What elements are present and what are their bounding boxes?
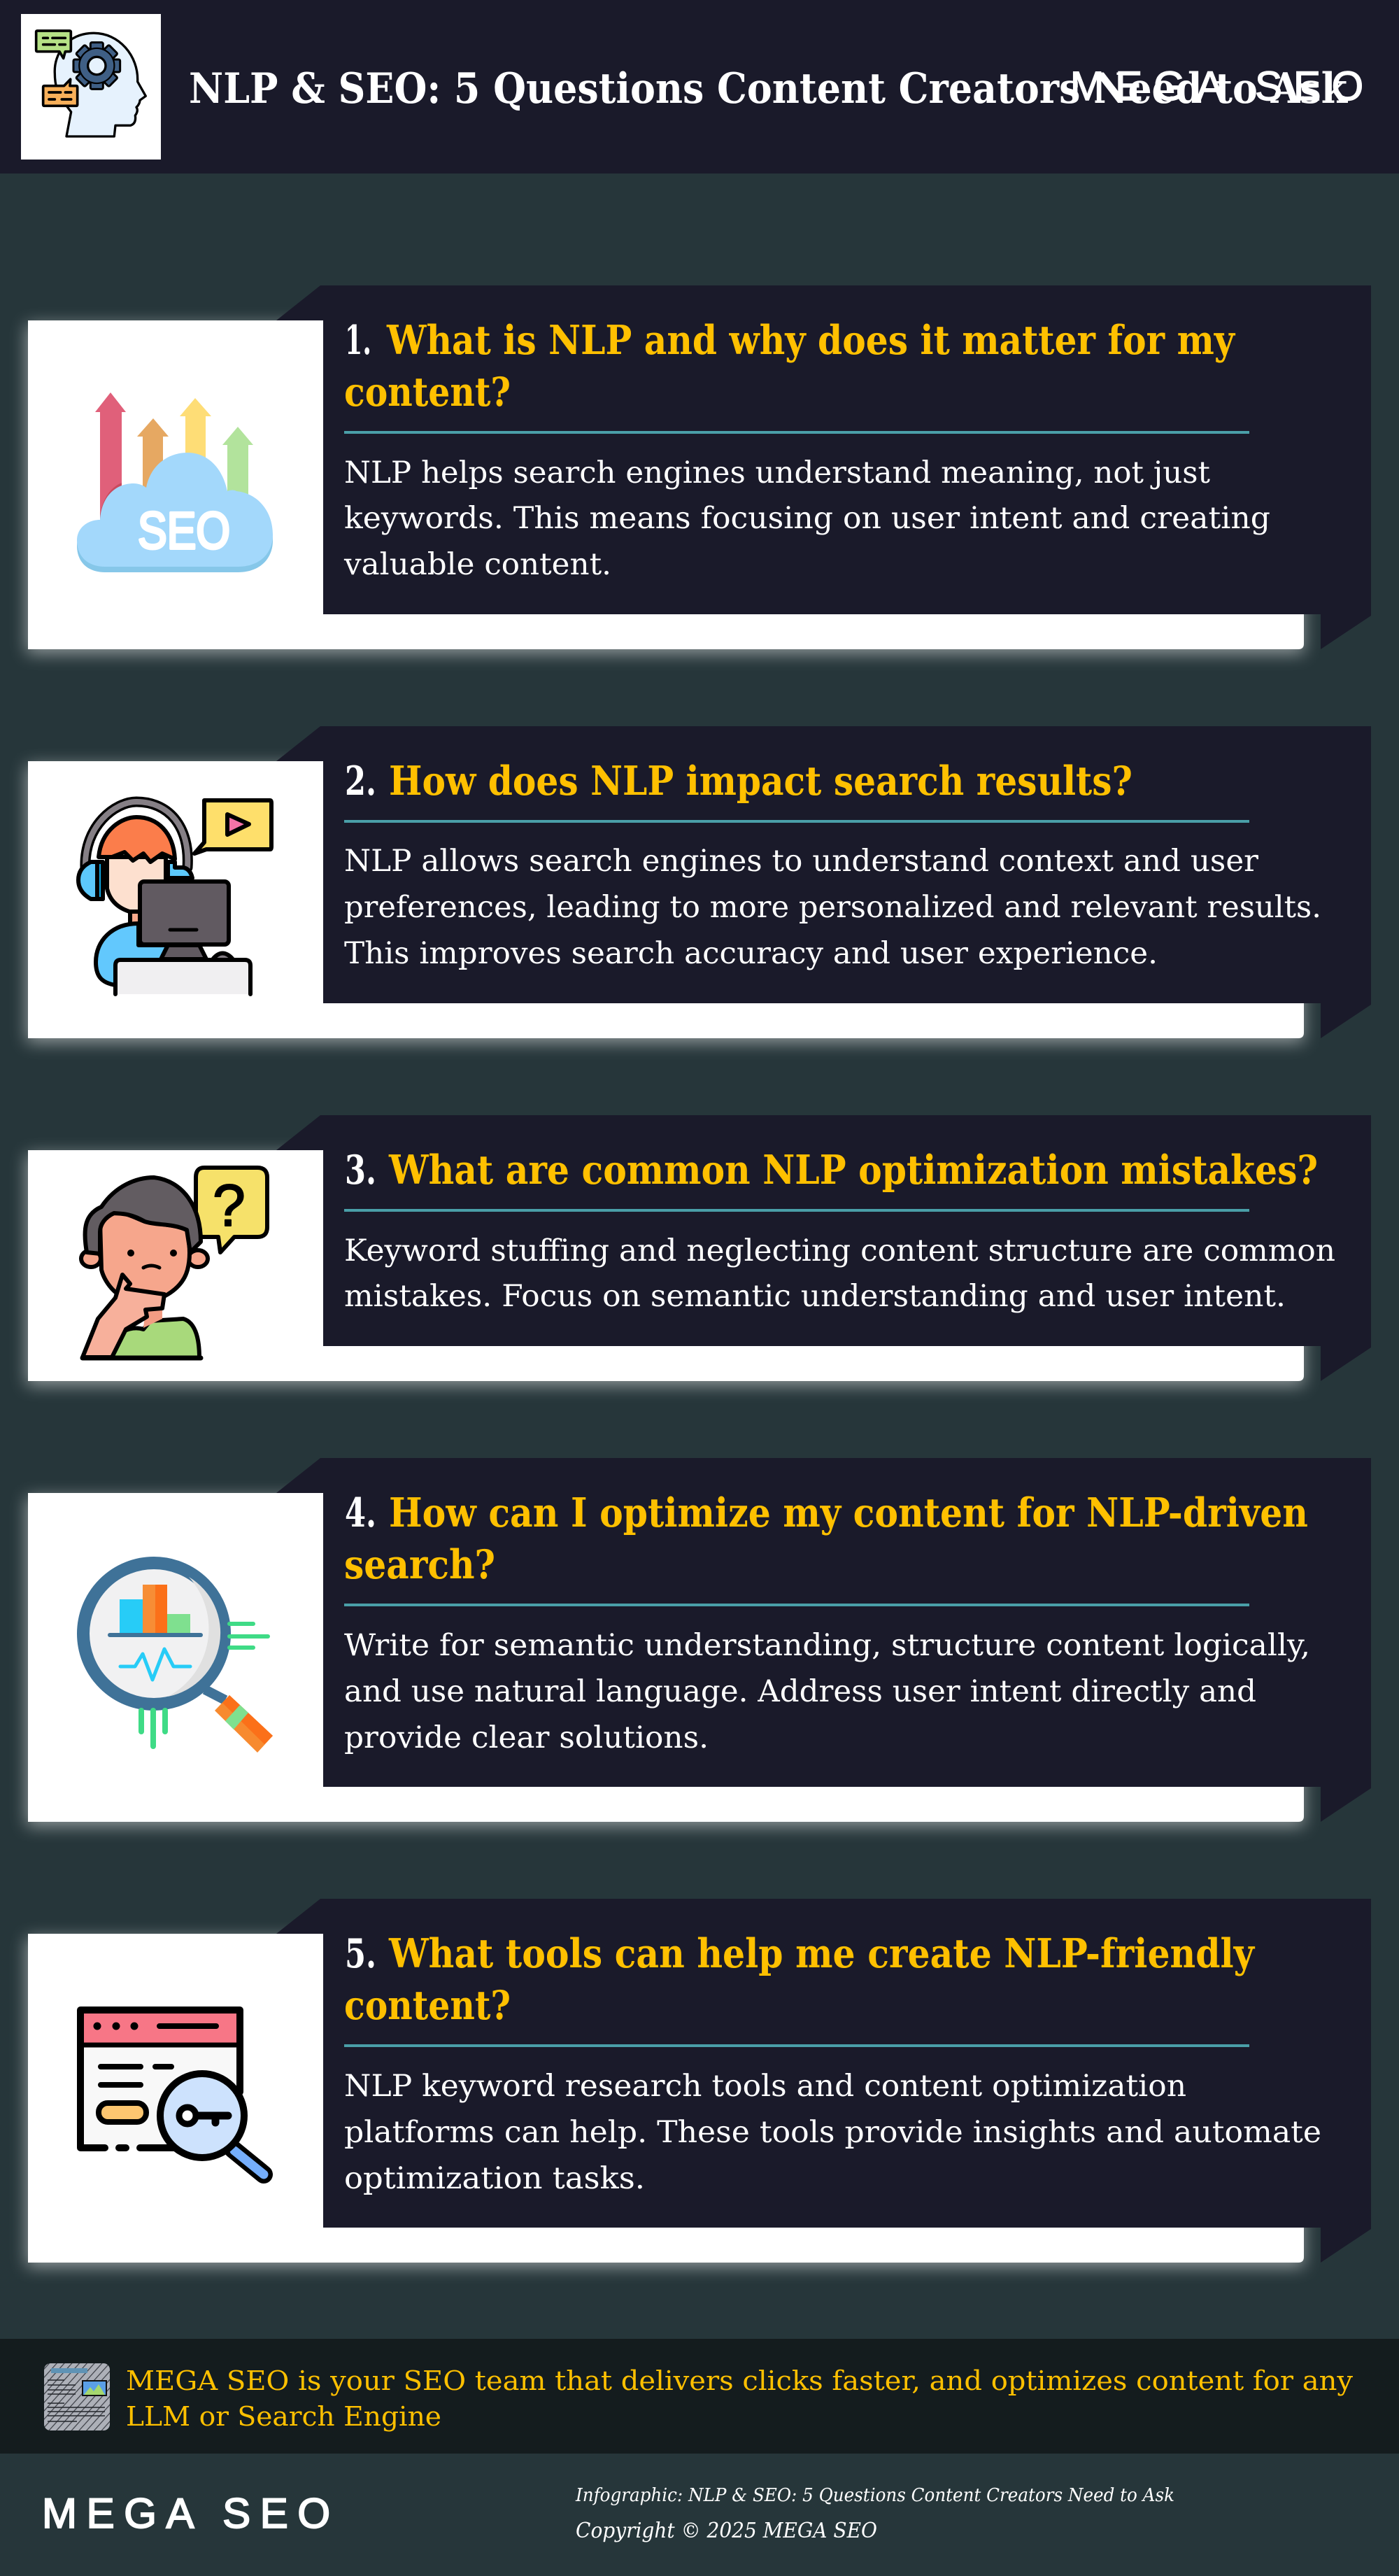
body text bbox=[343, 455, 1270, 582]
body text: provide clear solutions. bbox=[344, 1720, 709, 1755]
tagline: LLM or Search Engine bbox=[126, 2401, 441, 2432]
heading: 4. bbox=[345, 1489, 376, 1536]
body text bbox=[344, 844, 1321, 971]
heading: How does NLP impact search results? bbox=[389, 758, 1132, 805]
body text: optimization tasks. bbox=[344, 2161, 645, 2196]
heading bbox=[344, 1930, 1256, 2029]
icon: puzzled person with question mark: ? bbox=[213, 1173, 246, 1238]
body text: platforms can help. These tools provide insights and automate bbox=[344, 2115, 1321, 2150]
icon: SEO cloud with arrows bbox=[77, 392, 273, 572]
heading: What is NLP and why does it matter for my bbox=[386, 317, 1236, 364]
panel: question 3 bbox=[27, 1115, 1371, 1385]
tagline: MEGA SEO is your SEO team that delivers clicks faster, and optimizes content for any bbox=[126, 2365, 1354, 2396]
footer credits: Infographic: NLP & SEO: 5 Questions Content Creators Need to Ask bbox=[575, 2485, 1174, 2506]
brand name overlay: MEGA SEO bbox=[1070, 64, 1363, 109]
body text: and use natural language. Address user intent directly and bbox=[344, 1674, 1256, 1709]
heading: search? bbox=[344, 1541, 495, 1588]
icon: person with headset at monitor bbox=[78, 800, 271, 994]
body text: NLP allows search engines to understand context and user bbox=[344, 844, 1258, 879]
heading: 3. bbox=[345, 1147, 376, 1194]
heading bbox=[344, 317, 1236, 416]
body text: keywords. This means focusing on user intent and creating bbox=[344, 501, 1270, 536]
heading: 2. bbox=[345, 758, 376, 805]
panel: question 1 bbox=[27, 285, 1371, 653]
body text: Keyword stuffing and neglecting content structure are common bbox=[344, 1233, 1335, 1268]
heading bbox=[344, 1489, 1308, 1588]
heading: How can I optimize my content for NLP-driven bbox=[389, 1489, 1308, 1536]
icon: SEO cloud with arrows: SEO bbox=[138, 502, 230, 560]
body text bbox=[344, 1628, 1310, 1755]
footer credits: Copyright © 2025 MEGA SEO bbox=[576, 2519, 877, 2543]
icon: magnifying glass with chart bbox=[83, 1563, 273, 1753]
heading: What tools can help me create NLP-friendly bbox=[388, 1930, 1256, 1977]
icon: sketched document thumbnail bbox=[44, 2363, 110, 2430]
panel: question 2 bbox=[27, 726, 1371, 1042]
body text: mistakes. Focus on semantic understanding and user intent. bbox=[344, 1279, 1286, 1314]
footer logo: MEGA SEO bbox=[42, 2490, 330, 2537]
icon: browser window with key magnifier bbox=[80, 2010, 264, 2174]
body text: This improves search accuracy and user experience. bbox=[344, 936, 1158, 971]
heading: content? bbox=[344, 1982, 511, 2029]
body text bbox=[344, 1233, 1335, 1314]
panel: question 5 bbox=[27, 1899, 1371, 2267]
heading: 5. bbox=[345, 1930, 376, 1977]
panel: question 4 bbox=[27, 1458, 1371, 1826]
icon: puzzled person with question mark bbox=[81, 1168, 267, 1358]
body text bbox=[344, 2069, 1321, 2196]
body text: NLP helps search engines understand meaning, not just bbox=[344, 455, 1210, 490]
header bar bbox=[0, 0, 1399, 174]
body text: NLP keyword research tools and content optimization bbox=[344, 2069, 1186, 2104]
heading: content? bbox=[344, 369, 511, 416]
body text: valuable content. bbox=[343, 547, 611, 582]
body text: preferences, leading to more personalized and relevant results. bbox=[344, 890, 1321, 925]
heading: 1. bbox=[345, 317, 371, 364]
call to action band bbox=[0, 2339, 1399, 2454]
tagline bbox=[126, 2365, 1354, 2432]
icon: head with gear and speech bubbles bbox=[21, 14, 161, 160]
body text: Write for semantic understanding, structure content logically, bbox=[344, 1628, 1310, 1663]
footer credits bbox=[575, 2485, 1174, 2543]
